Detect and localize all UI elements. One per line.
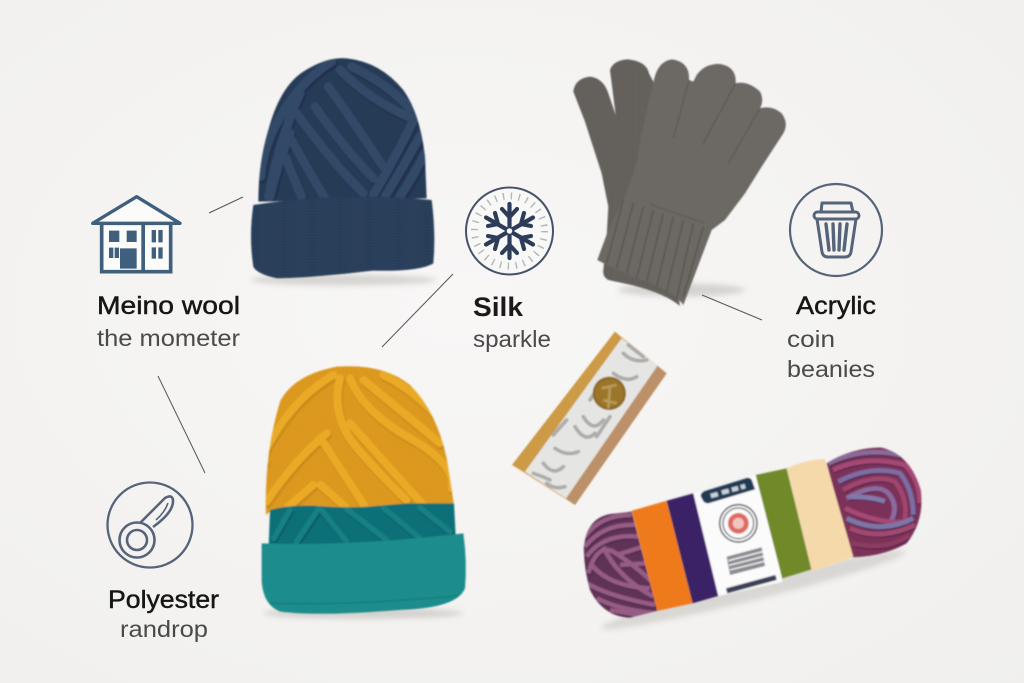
caption: coin beanies: beanies [787, 356, 875, 382]
caption: coin beanies: coin [787, 326, 835, 352]
yarn label logo [720, 505, 757, 542]
icon: snowflake [466, 188, 553, 274]
navy beanie [250, 58, 437, 285]
heading: Silk: Silk [473, 292, 524, 322]
navy beanie crown [258, 58, 427, 202]
yarn purple band [667, 493, 718, 603]
leader lines [158, 197, 762, 473]
icon: trash can [790, 184, 882, 276]
back glove [573, 59, 680, 306]
yarn label barcode bar [726, 575, 777, 593]
label: merino wool [93, 197, 240, 351]
ticket brown edge [566, 365, 667, 505]
glove finger seams and cuff ribs [607, 80, 760, 298]
ticket base [512, 332, 667, 505]
icon: ring with blade [108, 482, 192, 568]
grey gloves [573, 59, 786, 306]
navy beanie cuff [251, 197, 434, 278]
mustard and teal beanie [262, 366, 466, 619]
yarn right end [823, 443, 927, 560]
yarn skein [580, 443, 927, 638]
front glove [597, 59, 786, 305]
yarn left end [582, 510, 658, 619]
mustard crown [266, 366, 454, 515]
ticket gold edge [512, 332, 622, 472]
yarn white label [693, 475, 782, 596]
caption: the mometer: the mometer [97, 325, 240, 351]
heading: Acrylic: Acrylic [796, 292, 876, 320]
yarn cream band [787, 459, 853, 571]
yarn label navy tag [701, 478, 755, 503]
teal cuff [262, 533, 466, 614]
teal band [268, 503, 457, 555]
gold ticket with coin [512, 332, 667, 505]
navy beanie cables [261, 62, 425, 198]
mustard cables [263, 375, 452, 507]
caption: randrop: randrop [120, 616, 208, 642]
icon: house [93, 197, 180, 272]
caption: sparkle: sparkle [473, 326, 551, 352]
ticket coin [593, 377, 626, 410]
caption: coin beanies [787, 326, 875, 382]
heading: Meino wool: Meino wool [97, 292, 240, 320]
heading: Polyester: Polyester [108, 586, 219, 614]
ticket silver band [525, 338, 657, 498]
teal cables [274, 507, 450, 542]
label: silk [466, 188, 553, 352]
label: acrylic [787, 184, 882, 382]
yarn orange band [632, 501, 693, 611]
yarn green band [756, 468, 812, 578]
yarn label fine print [727, 547, 765, 575]
label: polyester [108, 482, 219, 642]
